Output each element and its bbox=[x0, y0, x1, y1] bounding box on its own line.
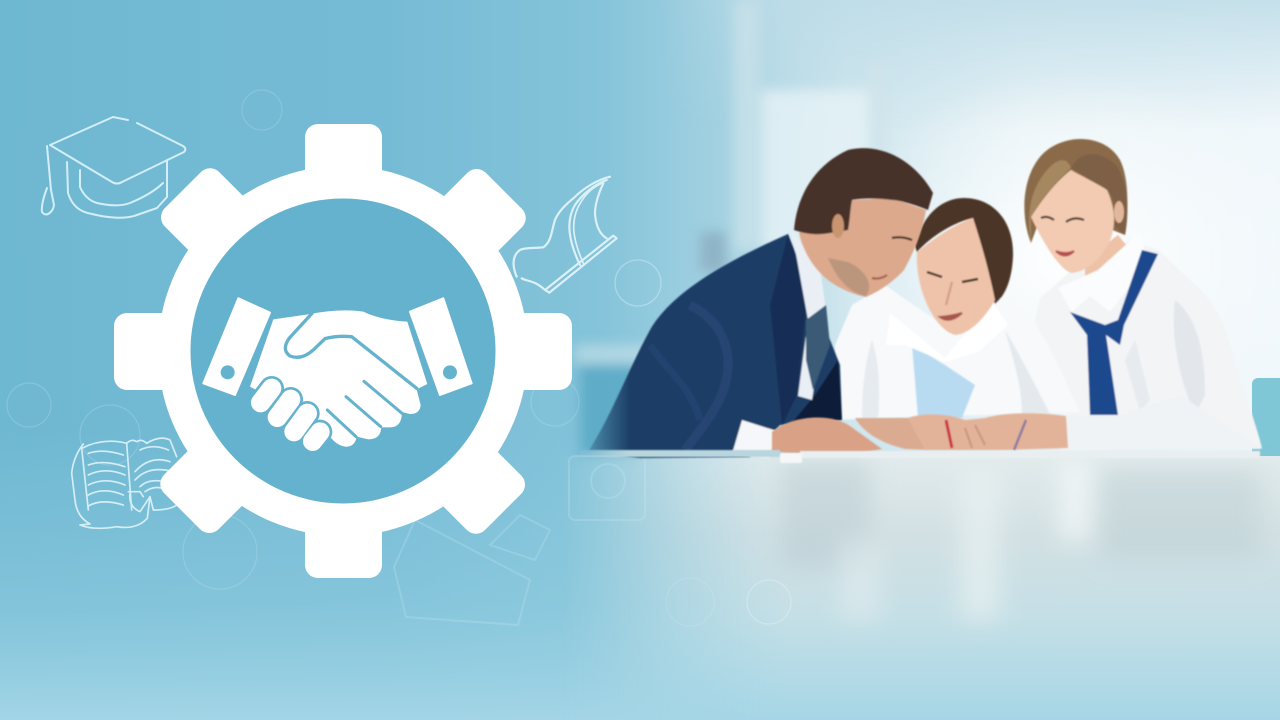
chair at right edge bbox=[1252, 378, 1280, 458]
person: woman in middle bbox=[835, 198, 1080, 420]
left cuff bbox=[203, 298, 270, 395]
man tie bbox=[806, 305, 830, 390]
icon: stacked book sketch bottom left bbox=[72, 438, 177, 528]
person: woman on right bbox=[1024, 139, 1262, 450]
right woman arm bbox=[1191, 403, 1262, 450]
gear inner disc bbox=[190, 198, 496, 504]
gear emblem with handshake bbox=[114, 124, 572, 578]
right woman neck bbox=[1084, 234, 1126, 276]
man shirt bbox=[792, 232, 826, 400]
faint background doodles bbox=[7, 90, 714, 626]
middle woman inner blouse bbox=[912, 345, 975, 418]
hands on table bbox=[772, 413, 1068, 453]
right woman shirt bbox=[1050, 250, 1263, 450]
right woman hair back bbox=[1024, 139, 1127, 243]
middle woman face bbox=[917, 218, 995, 335]
table edge papers bbox=[580, 450, 1260, 463]
middle woman hair bbox=[915, 198, 1013, 304]
man neck and face bbox=[799, 198, 926, 297]
table surface with reflections bbox=[581, 456, 1280, 706]
man ear bbox=[832, 214, 844, 238]
navy sliver under arm bbox=[1015, 390, 1032, 412]
icon: open book sketch top right bbox=[514, 177, 617, 293]
icon: graduation cap bbox=[42, 117, 185, 218]
right woman face bbox=[1031, 170, 1114, 273]
middle woman shirt bbox=[835, 285, 1080, 420]
office background: window columns and furniture bbox=[575, 0, 886, 455]
photo: three colleagues at a table bbox=[580, 139, 1262, 463]
person: man on left bbox=[588, 148, 933, 458]
right cuff bbox=[410, 298, 472, 395]
man hair bbox=[794, 148, 933, 234]
right woman tie bbox=[1070, 250, 1158, 415]
right woman collar bbox=[1060, 242, 1144, 310]
man cuff bbox=[732, 420, 780, 458]
man suit bbox=[588, 234, 842, 458]
faint circles bbox=[615, 260, 791, 624]
clasped hands bbox=[250, 310, 427, 447]
fingers bbox=[261, 388, 320, 441]
icon: handshake bbox=[203, 298, 472, 447]
gear outline in white bbox=[114, 124, 572, 578]
